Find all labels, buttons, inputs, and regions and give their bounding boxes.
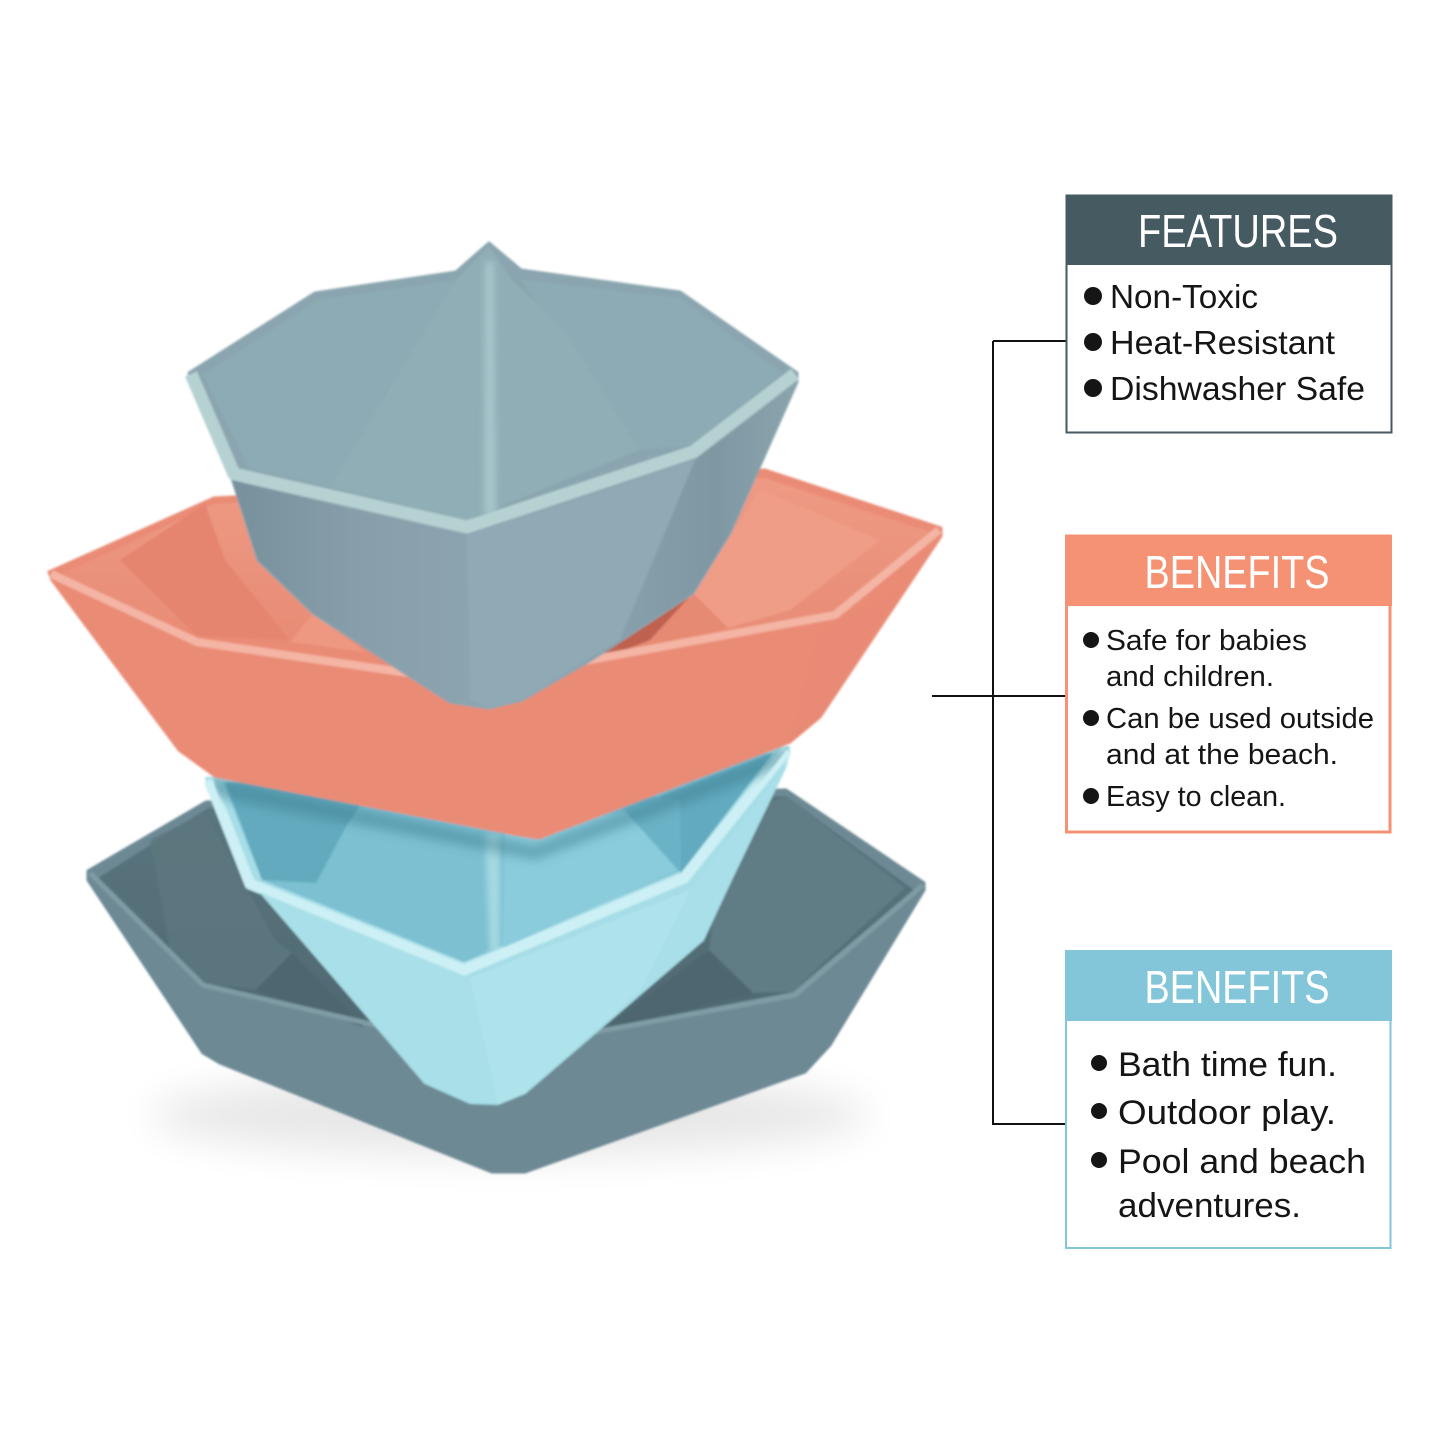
benefits list coral: [1083, 625, 1374, 813]
feature list: [1084, 278, 1365, 407]
heading: benefits blue: [1065, 950, 1392, 1021]
bowl shadow: [150, 1073, 870, 1157]
benefits list blue: [1091, 1046, 1366, 1225]
panel: benefits blue: [1065, 950, 1392, 1248]
top gray bowl: [189, 243, 797, 708]
exterior facets: [232, 480, 470, 702]
connector lines: [932, 341, 1066, 1124]
panel: benefits coral: [1065, 535, 1392, 832]
benefits list blue: adventures.: [1118, 1187, 1301, 1225]
feature list: Heat-Resistant: [1110, 324, 1335, 361]
product photo: stack of four bowls: [49, 243, 941, 1172]
benefits list blue: Pool and beach: [1118, 1143, 1366, 1181]
feature list: Dishwasher Safe: [1110, 370, 1365, 407]
coral bowl: [49, 470, 941, 838]
benefits list coral: Can be used outside: [1106, 703, 1374, 735]
heading: features: [1066, 195, 1392, 265]
heading: benefits blue: BENEFITS: [1144, 961, 1330, 1013]
panel: features: [1066, 195, 1392, 432]
bottom dark bowl: [88, 790, 924, 1172]
benefits list coral: Safe for babies: [1106, 625, 1307, 657]
heading: benefits coral: BENEFITS: [1144, 546, 1330, 598]
benefits list coral: and children.: [1106, 661, 1274, 693]
benefits list coral: Easy to clean.: [1106, 781, 1286, 813]
left and right inner walls: [226, 783, 375, 883]
shade under coral bowl: [205, 745, 790, 860]
light blue bowl: [206, 747, 790, 1104]
interior walls: [203, 280, 456, 487]
benefits list blue: Outdoor play.: [1118, 1094, 1336, 1132]
interior cone: [330, 246, 639, 520]
benefits list blue: Bath time fun.: [1118, 1046, 1337, 1084]
benefits list coral: and at the beach.: [1106, 739, 1338, 771]
feature list: Non-Toxic: [1110, 278, 1258, 315]
heading: benefits coral: [1065, 535, 1392, 606]
heading: features: FEATURES: [1138, 205, 1338, 257]
